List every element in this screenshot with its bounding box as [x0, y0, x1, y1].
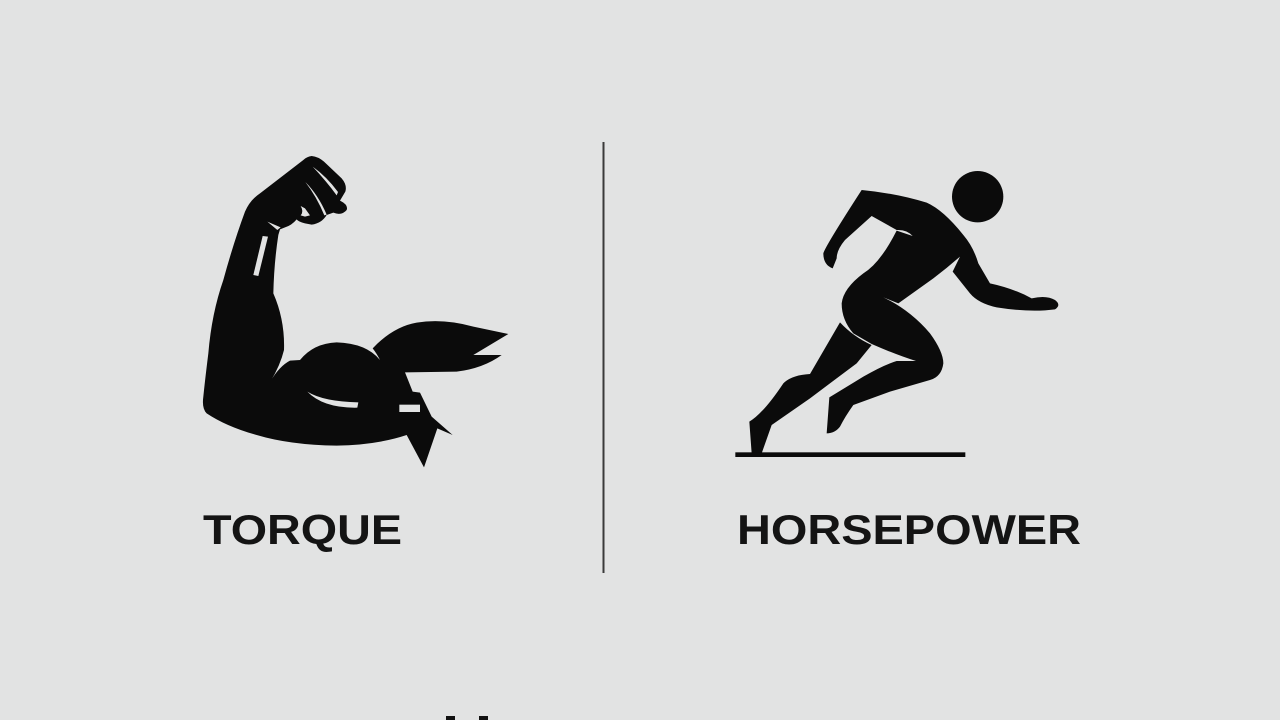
- runner rear leg: [749, 322, 872, 453]
- divider: [602, 142, 604, 573]
- runner head: [952, 171, 1003, 222]
- icon: sprinting runner (horsepower): [735, 171, 1058, 457]
- heading: horsepower: HORSEPOWER: [737, 506, 1081, 553]
- cropped letter tops at bottom edge: [446, 716, 488, 720]
- runner torso and front leg: [823, 190, 1058, 433]
- heading: torque: TORQUE: [203, 506, 402, 553]
- ground line: [735, 452, 965, 457]
- icon: flexed arm (torque): [203, 156, 508, 467]
- arm highlights: [253, 167, 420, 412]
